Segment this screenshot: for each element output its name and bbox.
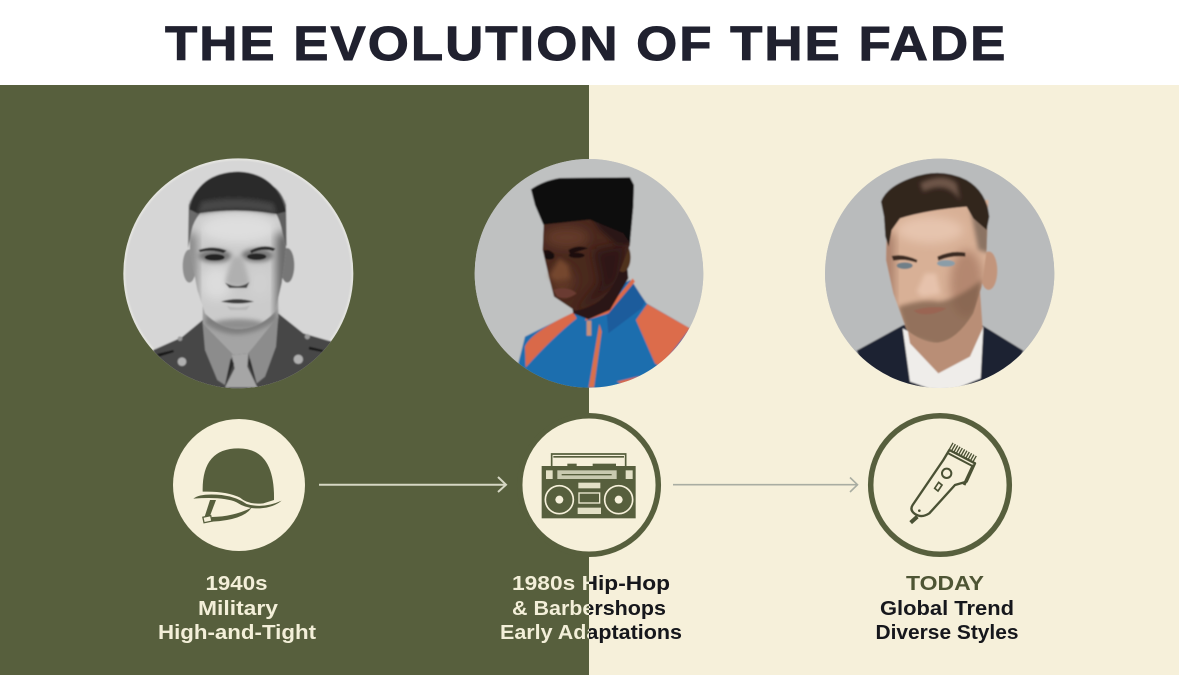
- hair top: [189, 172, 286, 214]
- uniform jacket: [153, 313, 332, 393]
- faded temple: [970, 207, 990, 253]
- icon: helmet in cream circle: [173, 419, 305, 551]
- label: today: Diverse Styles: [876, 622, 1018, 644]
- stubble: [898, 280, 982, 347]
- clipper body: [911, 450, 975, 516]
- helmet dome: [203, 448, 274, 504]
- label: 1980s: Early Adaptations: [500, 622, 682, 644]
- chin strap: [205, 500, 216, 518]
- label: today: Global Trend: [880, 598, 1014, 620]
- insignia: [178, 357, 186, 366]
- cassette deck: [579, 493, 600, 503]
- panel: right cream half: [589, 85, 1179, 675]
- jacket orange panels: [525, 313, 577, 367]
- ears: [183, 249, 196, 283]
- face: [886, 200, 988, 343]
- face shading: [200, 213, 277, 243]
- helmet brim: [193, 494, 282, 508]
- left speaker: [545, 486, 573, 514]
- portrait: 1940s military: [123, 158, 353, 393]
- hair: [881, 173, 989, 247]
- handle: [552, 454, 626, 467]
- label: today: [876, 573, 1018, 644]
- flat top hair: [531, 177, 634, 243]
- arrow: 1940s to 1980s: [319, 477, 506, 492]
- right speaker: [605, 486, 633, 514]
- label: 1940s: High-and-Tight: [158, 622, 316, 644]
- arrow: 1980s to today: [673, 478, 858, 492]
- label: today: TODAY: [906, 573, 985, 595]
- label: 1940s: 1940s: [206, 573, 268, 595]
- portrait: 1980s hip-hop flat top: [473, 157, 707, 393]
- brows, eyes, nose and mouth: [199, 246, 275, 253]
- switch and buttons: [942, 469, 951, 478]
- brows and eyes: [892, 252, 965, 263]
- face shading: [897, 217, 963, 243]
- tie: [225, 353, 257, 387]
- portrait: modern fade: [823, 157, 1057, 393]
- jacket: [518, 280, 690, 393]
- icon: clipper in ring: [871, 416, 1009, 554]
- label: 1980s: [500, 573, 682, 644]
- ear: [980, 251, 997, 290]
- shirt collars: [203, 323, 233, 385]
- label: 1940s: [158, 573, 316, 644]
- suit: [857, 325, 1023, 393]
- neck and ear: [572, 268, 630, 320]
- radio body: [542, 466, 636, 518]
- faded sides of hair: [187, 190, 200, 248]
- neck: [903, 290, 983, 373]
- white shirt: [903, 327, 983, 392]
- cord stub: [911, 517, 917, 523]
- face shading: [545, 227, 588, 247]
- panel: left olive half: [0, 85, 589, 675]
- brows, eyes, nose and mouth: [543, 247, 588, 257]
- label: 1940s: Military: [198, 598, 279, 620]
- title: THE EVOLUTION OF THE FADE: [165, 16, 1005, 71]
- label: 1980s: 1980s Hip-Hop: [512, 573, 670, 595]
- face: [543, 217, 631, 311]
- label: 1980s: & Barbershops: [512, 598, 666, 620]
- neck: [203, 297, 278, 355]
- tuner display: [557, 470, 617, 479]
- icon: boombox in ring: [520, 416, 658, 554]
- face: [189, 200, 287, 329]
- cutting teeth: [951, 446, 976, 460]
